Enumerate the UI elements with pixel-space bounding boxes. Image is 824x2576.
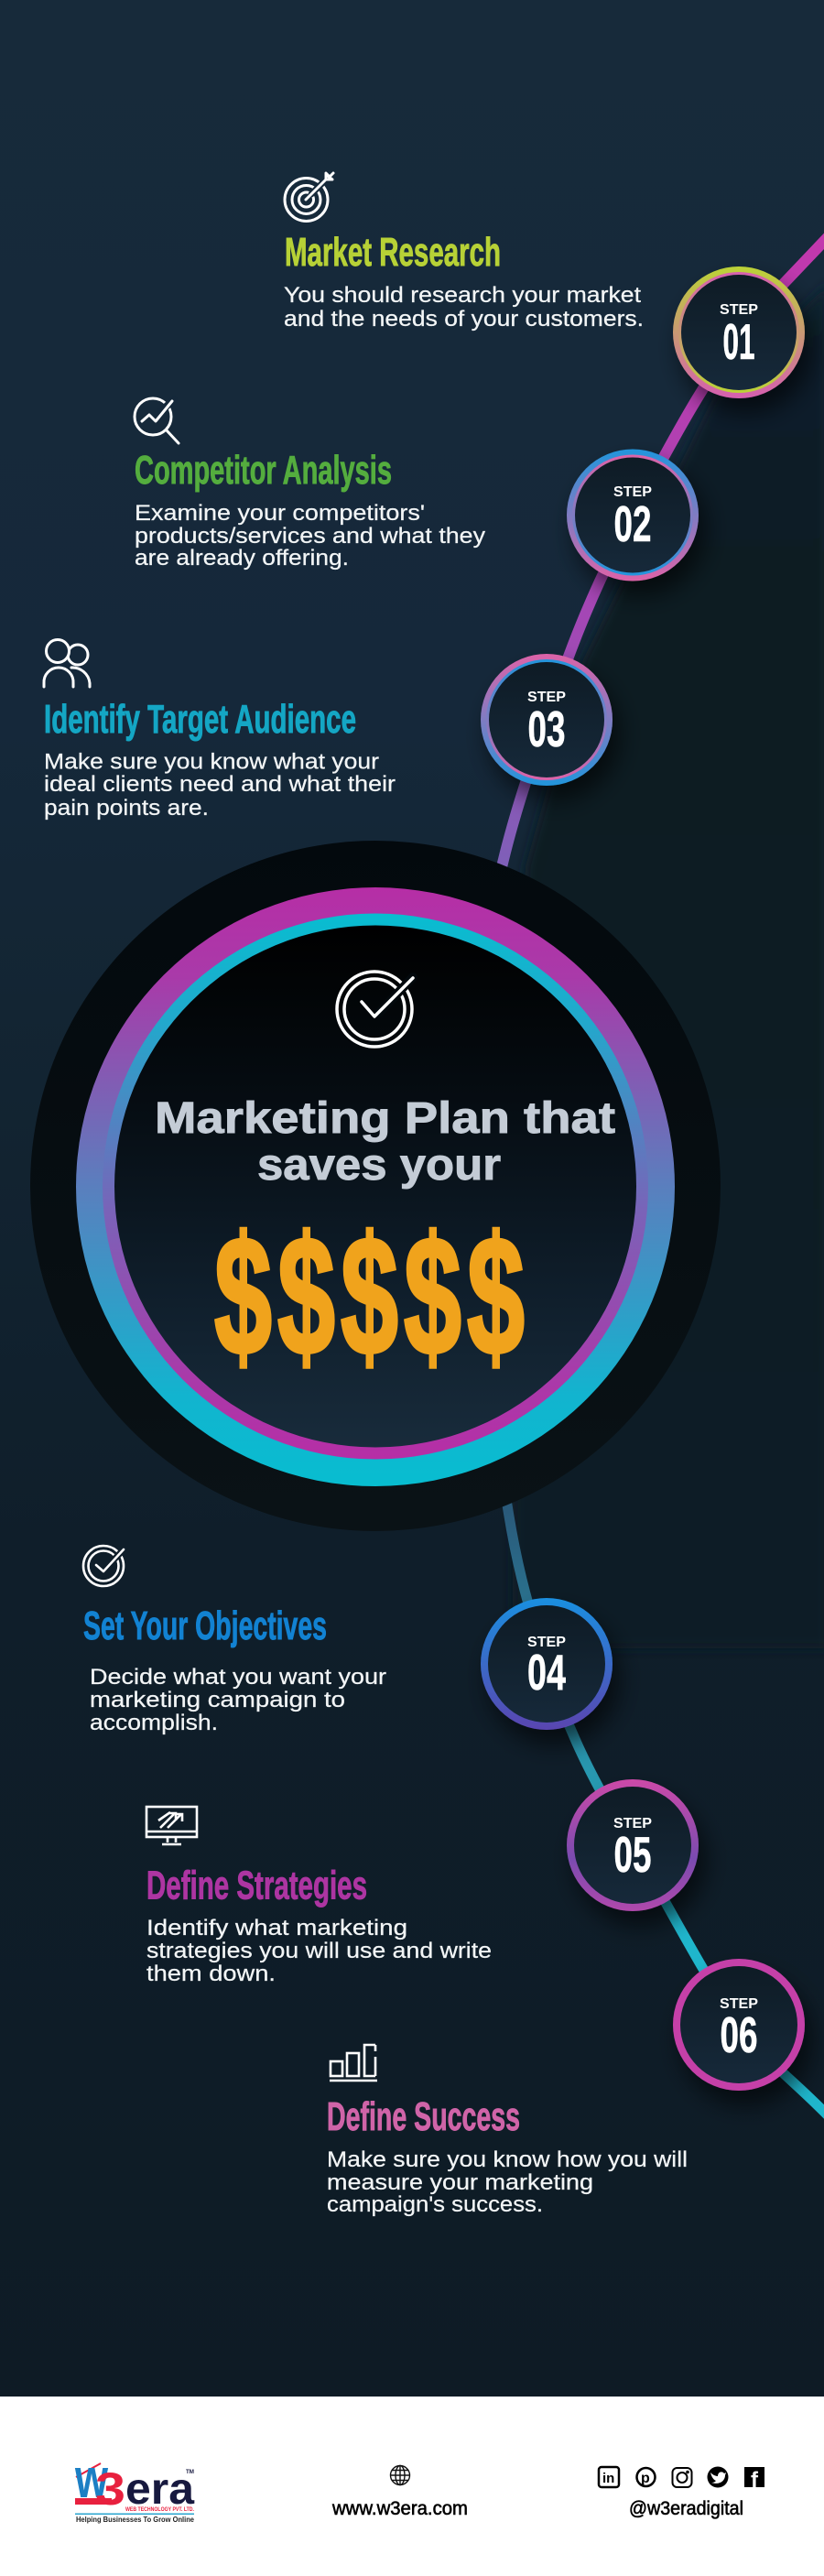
logo: WEB TECHNOLOGY PVT. LTD. [125, 2506, 194, 2513]
icon: check circle [83, 1546, 125, 1586]
panel: define strategies: them down. [146, 1962, 276, 1986]
panel: define success: campaign's success. [327, 2192, 543, 2217]
website: www.w3era.com [331, 2498, 468, 2519]
logo [74, 2448, 195, 2524]
step 05 badge: STEP [613, 1816, 652, 1831]
panel: define strategies: strategies you will use and write [146, 1939, 492, 1963]
panel: define strategies: Identify what marketing [146, 1916, 407, 1940]
dollar signs: $ [214, 1202, 272, 1391]
logo: 3 [95, 2463, 125, 2515]
diagonal shadow area right of the path [513, 284, 824, 1648]
panel: market research: and the needs of your customers. [284, 307, 644, 332]
icon: linkedin: in [602, 2471, 614, 2486]
central circle [30, 841, 721, 1531]
panel: define strategies [146, 1807, 492, 1986]
logo: era [125, 2465, 194, 2514]
logo: TM [186, 2470, 194, 2475]
upper timeline path [497, 235, 824, 888]
panel: market research: Market Research [285, 230, 501, 275]
step 06 badge: 06 [720, 2006, 758, 2063]
panel: identify target audience: ideal clients need and what their [44, 772, 396, 797]
step 04 badge: STEP [527, 1635, 566, 1650]
icon: central check circle [337, 972, 413, 1047]
panel: market research [284, 173, 644, 332]
step 04 badge [481, 1598, 613, 1730]
central title: saves your [257, 1141, 501, 1190]
step 01 badge [673, 266, 805, 398]
step 03 badge [481, 654, 613, 786]
icon: instagram [672, 2468, 692, 2487]
step 01 badge: STEP [720, 302, 758, 318]
step 05 badge: 05 [613, 1826, 652, 1883]
panel: define success [327, 2045, 688, 2217]
step 03 badge: 03 [527, 701, 566, 757]
central title [155, 1094, 615, 1190]
step 03 badge: STEP [527, 690, 566, 705]
step 02 badge: 02 [613, 495, 652, 552]
step 04 badge: 04 [527, 1644, 566, 1701]
panel: identify target audience: Identify Target Audience [44, 697, 356, 742]
step 01 badge: 01 [723, 313, 754, 370]
panel: competitor analysis [135, 398, 485, 571]
dollar signs: $ [277, 1202, 335, 1391]
panel: competitor analysis: products/services and what they [135, 524, 485, 549]
panel: identify target audience: pain points are. [44, 796, 209, 821]
panel: market research: You should research your market [284, 283, 641, 308]
step 06 badge [673, 1959, 805, 2091]
panel: competitor analysis: Competitor Analysis [135, 448, 392, 493]
logo: w [74, 2448, 108, 2509]
icon: facebook: f [751, 2468, 759, 2493]
icon: twitter [707, 2467, 729, 2487]
dollar signs: $ [467, 1202, 525, 1391]
panel: competitor analysis: are already offering. [135, 546, 349, 571]
icon: two people [44, 639, 90, 687]
icon: facebook [744, 2467, 764, 2493]
panel: competitor analysis: Examine your competitors' [135, 501, 425, 526]
panel: define success: Make sure you know how you will [327, 2147, 688, 2172]
footer [0, 2397, 824, 2576]
icon: target with arrow [285, 173, 333, 222]
step 05 badge [567, 1779, 699, 1911]
step 02 badge: STEP [613, 484, 652, 500]
social handle: @w3eradigital [629, 2498, 743, 2519]
dollar signs: $ [404, 1202, 461, 1391]
panel: set your objectives: marketing campaign to [90, 1688, 345, 1712]
icon: bar chart [330, 2045, 377, 2081]
step 02 badge [567, 449, 699, 581]
central title: Marketing Plan that [155, 1094, 615, 1143]
panel: set your objectives: accomplish. [90, 1711, 218, 1735]
lower timeline path [505, 1493, 824, 2116]
panel: define strategies: Define Strategies [146, 1863, 367, 1908]
dollar signs: $ [341, 1202, 398, 1391]
panel: define success: Define Success [327, 2094, 520, 2139]
icon: monitor with arrows [146, 1807, 197, 1844]
panel: set your objectives [83, 1546, 386, 1735]
dollar signs [214, 1202, 525, 1391]
logo: Helping Businesses To Grow Online [76, 2516, 195, 2524]
step 06 badge: STEP [720, 1996, 758, 2012]
icon: pinterest [637, 2468, 656, 2486]
panel: define success: measure your marketing [327, 2170, 593, 2195]
panel: identify target audience: Make sure you know what your [44, 749, 379, 775]
panel: set your objectives: Set Your Objectives [83, 1603, 327, 1648]
icon: globe [390, 2465, 410, 2485]
panel: set your objectives: Decide what you want your [90, 1665, 386, 1690]
icon: pinterest: p [641, 2471, 650, 2486]
panel: identify target audience [44, 639, 396, 821]
icon: magnifier with chart [135, 398, 179, 443]
icon: linkedin [599, 2467, 619, 2487]
